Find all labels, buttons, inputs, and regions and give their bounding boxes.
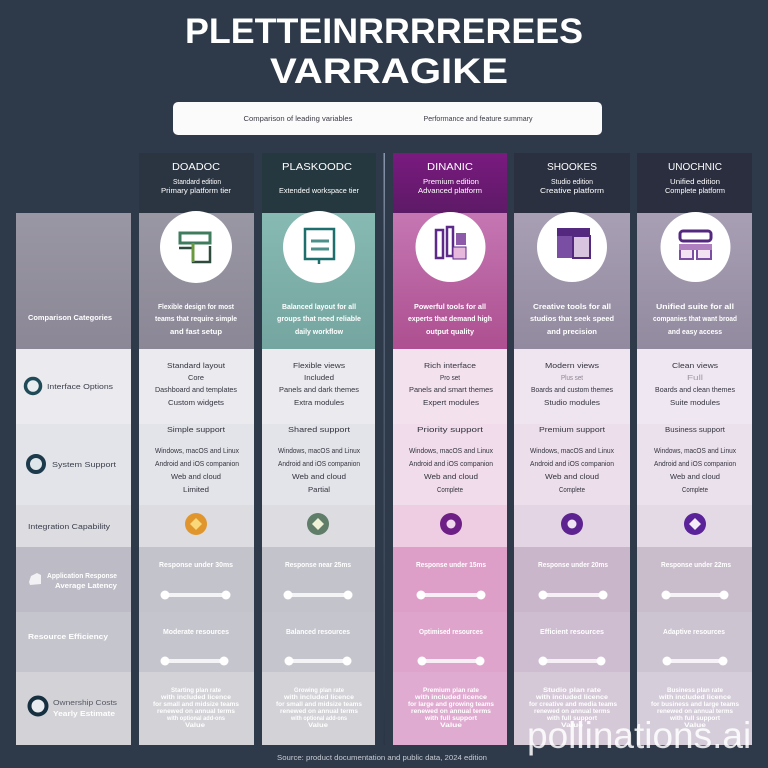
rating dot (684, 513, 706, 535)
column 4 (514, 153, 630, 745)
row five: Efficient resources (540, 629, 604, 636)
row label: first: Interface Options (47, 382, 113, 391)
row one: Pro set (440, 373, 461, 382)
row two (262, 424, 375, 505)
column 2 (262, 153, 376, 745)
cost text: for small and midsize teams (276, 702, 363, 708)
label panel: top (16, 213, 131, 349)
row six (393, 672, 507, 745)
header: SHOOKES (547, 161, 597, 173)
cost text: with included licence (658, 695, 732, 701)
cost text: with full support (546, 716, 597, 722)
row one: Clean views (672, 361, 718, 370)
row two: Windows, macOS and Linux (155, 446, 239, 455)
row five (139, 612, 254, 672)
row two: Android and iOS companion (530, 459, 614, 468)
slider (160, 656, 228, 666)
top panel: daily workflow (295, 329, 344, 336)
row two: Complete (437, 485, 463, 494)
row label: sixth: Ownership Costs (53, 698, 117, 707)
row four: Response under 22ms (661, 562, 731, 569)
row label: second: System Support (52, 460, 117, 469)
cost text (276, 688, 363, 729)
icon (660, 212, 730, 282)
cost text (408, 688, 495, 729)
cost text: with full support (669, 716, 720, 722)
row label: fifth: Resource Efficiency (28, 634, 108, 641)
row five: Adaptive resources (663, 629, 725, 636)
row one: Included (304, 373, 334, 382)
header: Advanced platform (418, 186, 482, 195)
row four (262, 547, 375, 612)
column 5 (637, 153, 752, 745)
row six (514, 672, 630, 745)
row five: Balanced resources (286, 629, 350, 636)
top panel: Flexible design for most (158, 304, 235, 311)
row two: Web and cloud (545, 472, 599, 481)
cost text: Value (684, 723, 707, 729)
top panel: Unified suite for all (656, 304, 734, 311)
row label: second (16, 424, 131, 505)
cost text: with optional add-ons (290, 716, 348, 722)
cost text (153, 688, 240, 729)
cost text: renewed on annual terms (157, 709, 236, 715)
top panel: output quality (426, 329, 474, 336)
row label: sixth: Yearly Estimate (53, 711, 115, 718)
legend bar: Comparison of leading variables (244, 114, 353, 123)
row one: Core (188, 373, 204, 382)
row four: Response under 15ms (416, 562, 486, 569)
footer note: Source: product documentation and public data, 2024 edition (277, 753, 487, 762)
row three (637, 505, 752, 547)
row label: sixth (16, 672, 131, 745)
cost text: renewed on annual terms (534, 709, 611, 715)
row two: Windows, macOS and Linux (654, 446, 736, 455)
label: category: Comparison Categories (28, 315, 112, 322)
row label: first (16, 349, 131, 424)
row one: Panels and dark themes (279, 385, 359, 394)
row five: Moderate resources (163, 629, 229, 636)
cost text: with included licence (414, 695, 488, 701)
row six (262, 672, 375, 745)
row two (514, 424, 630, 505)
cost text: Value (561, 723, 584, 729)
row two: Android and iOS companion (409, 459, 493, 468)
row one: Panels and smart themes (409, 385, 493, 394)
rating dot (561, 513, 583, 535)
row two (139, 424, 254, 505)
header: UNOCHNIC (668, 161, 722, 173)
rating dot (307, 513, 329, 535)
row two: Limited (183, 485, 209, 494)
header: Complete platform (665, 186, 725, 195)
header: Standard edition (173, 177, 221, 186)
row two: Web and cloud (670, 472, 720, 481)
top panel (637, 212, 752, 349)
cost text: with included licence (535, 695, 609, 701)
header: PLASKOODC (282, 161, 352, 173)
row one: Extra modules (294, 398, 344, 407)
title: VARRAGIKE (270, 52, 508, 91)
top panel: and easy access (668, 329, 722, 336)
row two: Android and iOS companion (654, 459, 736, 468)
top panel: studios that seek speed (530, 316, 614, 323)
header: DOADOC (172, 161, 220, 173)
legend bar (173, 102, 602, 135)
row two: Complete (682, 485, 708, 494)
cost text: Business plan rate (667, 688, 724, 694)
row four (139, 547, 254, 612)
top panel: teams that require simple (155, 316, 237, 323)
row two: Web and cloud (292, 472, 346, 481)
row three (139, 505, 254, 547)
row one: Custom widgets (168, 398, 224, 407)
header (637, 153, 752, 213)
title: PLETTEINRRRREREES (185, 12, 583, 51)
top panel (139, 211, 254, 349)
cost text (651, 688, 740, 729)
row label: fourth (16, 547, 131, 612)
icon (537, 212, 607, 282)
row one (637, 349, 752, 424)
header: DINANIC (427, 161, 473, 173)
center divider (384, 153, 385, 745)
row four: Response under 30ms (159, 562, 233, 569)
cost text: renewed on annual terms (280, 709, 359, 715)
row one (514, 349, 630, 424)
top panel: groups that need reliable (277, 316, 361, 323)
slider (538, 656, 606, 666)
top panel: Powerful tools for all (414, 304, 486, 311)
row two: Shared support (288, 425, 351, 434)
row two: Web and cloud (171, 472, 221, 481)
icon (283, 211, 355, 283)
row five (262, 612, 375, 672)
row one: Standard layout (167, 361, 226, 370)
row two: Windows, macOS and Linux (530, 446, 614, 455)
row one: Modern views (545, 361, 599, 370)
slider (284, 590, 352, 600)
row five (637, 612, 752, 672)
row two: Web and cloud (424, 472, 478, 481)
slider (416, 590, 486, 600)
row six (637, 672, 752, 745)
icon (416, 212, 486, 282)
cost text: for large and growing teams (408, 702, 495, 708)
row four: Response near 25ms (285, 562, 351, 569)
row one: Rich interface (424, 361, 476, 370)
row two: Android and iOS companion (278, 459, 360, 468)
cost text: Value (185, 723, 206, 729)
column 1 (139, 153, 254, 745)
cost text: Premium plan rate (423, 688, 480, 694)
top panel: and precision (547, 329, 597, 336)
rating dot (185, 513, 207, 535)
row four (393, 547, 507, 612)
row five (514, 612, 630, 672)
slider (538, 590, 608, 600)
row label: fourth: Average Latency (55, 583, 117, 590)
column: row labels (16, 213, 131, 745)
top panel (262, 211, 375, 349)
row one: Studio modules (544, 398, 600, 407)
row three (514, 505, 630, 547)
top panel: Creative tools for all (533, 304, 611, 311)
header (514, 153, 630, 213)
cost text (529, 688, 618, 729)
row one (262, 349, 375, 424)
row label: third: Integration Capability (28, 522, 110, 531)
top panel: Balanced layout for all (282, 304, 356, 311)
header: Creative platform (540, 186, 604, 195)
row one: Flexible views (293, 361, 345, 370)
row four (514, 547, 630, 612)
row two: Windows, macOS and Linux (409, 446, 493, 455)
legend bar: Performance and feature summary (424, 114, 533, 123)
row three (262, 505, 375, 547)
rating dot (440, 513, 462, 535)
header (139, 153, 254, 213)
slider (160, 590, 230, 600)
row two (393, 424, 507, 505)
row label: fourth: Application Response (47, 573, 117, 580)
cost text: renewed on annual terms (657, 709, 734, 715)
row label: fifth (16, 612, 131, 672)
row one: Boards and custom themes (531, 385, 613, 394)
title (185, 12, 583, 91)
header: Extended workspace tier (279, 186, 359, 195)
row one: Dashboard and templates (155, 385, 237, 394)
top panel: companies that want broad (653, 316, 737, 323)
cost text: Growing plan rate (294, 688, 345, 694)
row two (637, 424, 752, 505)
slider (662, 656, 728, 666)
cost text: for creative and media teams (529, 702, 618, 708)
row five (393, 612, 507, 672)
cost text: Value (308, 723, 329, 729)
row two: Android and iOS companion (155, 459, 239, 468)
top panel (393, 212, 507, 349)
cost text: with optional add-ons (166, 716, 226, 722)
header: Studio edition (551, 177, 593, 186)
header (393, 153, 507, 213)
row one: Expert modules (423, 398, 479, 407)
row one: Plus set (561, 373, 584, 382)
row two: Simple support (167, 425, 226, 434)
cost text: Studio plan rate (543, 688, 602, 694)
slider (418, 656, 484, 666)
row two: Partial (308, 485, 330, 494)
row two: Complete (559, 485, 585, 494)
row two: Windows, macOS and Linux (278, 446, 360, 455)
header: Unified edition (670, 177, 720, 186)
header: Premium edition (423, 177, 479, 186)
row one (139, 349, 254, 424)
top panel: experts that demand high (408, 316, 492, 323)
row five: Optimised resources (419, 629, 483, 636)
cost text: for business and large teams (651, 702, 740, 708)
watermark: pollinations.ai (527, 715, 751, 756)
row label: third (16, 505, 131, 547)
row two: Premium support (539, 425, 606, 434)
cost text: with full support (424, 716, 477, 722)
cost text: with included licence (160, 695, 232, 701)
cost text: Value (440, 723, 463, 729)
cost text: Starting plan rate (171, 688, 222, 694)
top panel: and fast setup (170, 329, 222, 336)
row two: Business support (665, 425, 726, 434)
slider (662, 590, 728, 600)
row one: Suite modules (670, 398, 720, 407)
row four (637, 547, 752, 612)
row one: Full (687, 373, 703, 382)
row one (393, 349, 507, 424)
row four: Response under 20ms (538, 562, 608, 569)
cost text: with included licence (283, 695, 355, 701)
row two: Priority support (417, 425, 484, 434)
icon (160, 211, 232, 283)
row six (139, 672, 254, 745)
cost text: for small and midsize teams (153, 702, 240, 708)
header: Primary platform tier (161, 186, 232, 195)
header (262, 153, 376, 213)
row three (393, 505, 507, 547)
cost text: renewed on annual terms (411, 709, 492, 715)
top panel (514, 212, 630, 349)
slider (284, 656, 352, 666)
row one: Boards and clean themes (655, 385, 735, 394)
column 3 (393, 153, 507, 745)
